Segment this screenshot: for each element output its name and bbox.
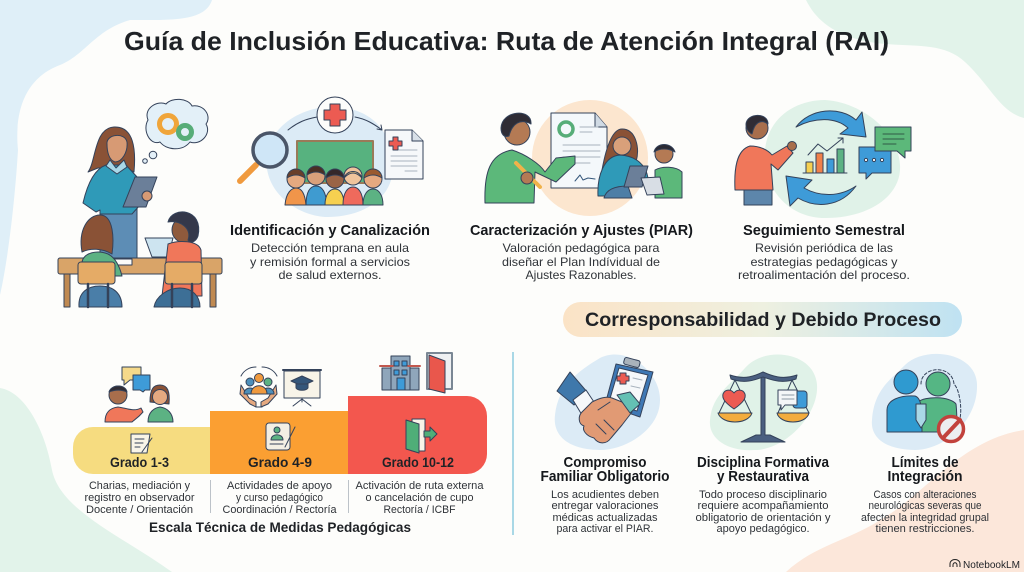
boy with tablet — [641, 144, 682, 198]
text block: seguimiento: Seguimiento Semestral — [743, 222, 905, 239]
watermark: NotebookLM: NotebookLM — [963, 559, 1020, 571]
text block: compromiso — [540, 454, 670, 535]
scale caption: grado 10-12: o cancelación de cupo — [366, 492, 474, 504]
step: grado 10-12: Grado 10-12 — [382, 454, 454, 470]
text block: seguimiento: estrategias pedagógicas y — [750, 255, 898, 269]
teacher — [83, 127, 157, 261]
text block: disciplina — [696, 454, 831, 535]
scale caption: grado 4-9: Actividades de apoyo — [227, 480, 332, 492]
blue blob — [872, 354, 977, 450]
staircase chart: grades — [73, 396, 487, 474]
illustration: identificación — [240, 97, 423, 217]
icon: red door — [427, 353, 452, 393]
text block: caracterización: Valoración pedagógica para — [502, 241, 660, 255]
text block: limites: neurológicas severas que — [868, 500, 982, 512]
text block: compromiso: entregar valoraciones — [552, 500, 659, 512]
text block: limites: afecten la integridad grupal — [861, 512, 989, 524]
clipboard — [605, 357, 653, 417]
chalkboard — [297, 141, 373, 183]
text block: compromiso: médicas actualizadas — [552, 512, 658, 524]
background blob: top left blue — [0, 0, 212, 295]
icon: graduation board — [283, 370, 321, 406]
illustration: caracterización — [485, 100, 682, 216]
thought bubble with gears — [143, 99, 208, 163]
text block: limites: Casos con alteraciones — [874, 489, 977, 501]
speech bubbles — [859, 127, 911, 179]
group of children — [285, 166, 383, 205]
mint blob — [710, 355, 817, 450]
text block: limites — [861, 454, 989, 535]
icon: shield — [916, 404, 926, 428]
scale caption: grado 10-12 — [356, 480, 484, 516]
student: girl — [78, 215, 122, 307]
green person — [918, 370, 961, 432]
scale caption: grado 4-9 — [222, 480, 337, 516]
heading pill: corresponsabilidad — [563, 302, 962, 337]
blue person — [887, 370, 922, 432]
step: grado 4-9 — [210, 411, 348, 474]
illustration: handshake — [555, 354, 660, 450]
text block: disciplina: y Restaurativa — [717, 468, 810, 485]
text block: disciplina: Todo proceso disciplinario — [699, 489, 827, 501]
medical document — [385, 130, 423, 179]
text block: disciplina: obligatorio de orientación y — [696, 512, 831, 524]
scale caption: grado 10-12: Rectoría / ICBF — [384, 504, 456, 516]
text block: identificación — [230, 222, 430, 282]
background blob: bottom left mint — [0, 388, 172, 572]
step: grado 1-3 — [73, 427, 210, 474]
handshake hands — [557, 372, 640, 443]
text block: compromiso: Los acudientes deben — [551, 489, 659, 501]
text block: seguimiento — [738, 222, 910, 282]
icon: chat bubbles — [778, 390, 807, 410]
vertical divider — [512, 352, 514, 535]
medical cross circle — [317, 97, 353, 133]
text block: identificación: de salud externos. — [278, 268, 382, 282]
scale caption: grado 1-3: registro en observador — [84, 492, 195, 504]
mint circle — [765, 100, 900, 218]
text block: identificación: Detección temprana en aula — [251, 241, 409, 255]
step: grado 10-12 — [348, 396, 487, 474]
peach circle — [532, 100, 648, 216]
PIAR document — [551, 113, 607, 188]
scale caption: grado 4-9: y curso pedagógico — [236, 492, 323, 504]
icon group: conversation — [105, 367, 173, 422]
scale caption: grado 1-3: Charias, mediación y — [89, 480, 190, 492]
illustration: scale of justice — [710, 355, 817, 450]
text block: compromiso: Familiar Obligatorio — [540, 468, 670, 485]
illustration: seguimiento — [735, 100, 911, 218]
text block: caracterización: Ajustes Razonables. — [526, 268, 636, 282]
title: Guía de Inclusión Educativa: Ruta de Atención Integral (RAI) — [124, 26, 889, 56]
text block: caracterización — [470, 222, 693, 282]
illustration: teacher with students — [58, 99, 222, 307]
student: boy — [145, 212, 202, 307]
background blob: top right mint — [806, 0, 1024, 118]
text block: disciplina: requiere acompañamiento — [698, 500, 828, 512]
text block: identificación: y remisión formal a servicios — [250, 255, 410, 269]
background blob: bottom right peach — [786, 430, 1024, 572]
icon group: hands and community — [240, 367, 277, 407]
text block: caracterización: Caracterización y Ajustes (PIAR) — [470, 222, 693, 239]
icon: stop sign — [938, 416, 964, 442]
scale caption: grado 1-3: Docente / Orientación — [86, 504, 193, 516]
icon: school building — [380, 356, 420, 390]
text block: limites: Integración — [888, 468, 962, 485]
text block: identificación: Identificación y Canalización — [230, 222, 430, 239]
step: grado 1-3: Grado 1-3 — [110, 454, 169, 470]
scale caption: grado 1-3 — [84, 480, 195, 516]
arc arrows — [288, 117, 382, 130]
text block: limites: Límites de — [892, 454, 958, 471]
scale title: Escala Técnica de Medidas Pedagógicas — [149, 519, 411, 535]
text block: disciplina: Disciplina Formativa — [697, 454, 830, 471]
scale caption: grado 10-12: Activación de ruta externa — [356, 480, 484, 492]
magnifier — [240, 133, 287, 181]
table — [58, 258, 222, 307]
text block: caracterización: diseñar el Plan Indívidual de — [502, 255, 660, 269]
woman with tablet — [598, 129, 648, 198]
text block: disciplina: apoyo pedagógico. — [716, 523, 810, 535]
text block: seguimiento: retroalimentación del proceso. — [738, 268, 910, 282]
cycle arrows — [786, 111, 866, 206]
blue blob — [266, 107, 393, 217]
illustration: limits of integration — [872, 354, 977, 450]
scale caption: grado 4-9: Coordinación / Rectoría — [222, 504, 337, 516]
text block: compromiso: para activar el PIAR. — [556, 523, 654, 535]
text block: compromiso: Compromiso — [564, 454, 646, 471]
heading pill: corresponsabilidad: Corresponsabilidad y Debido Proceso — [585, 310, 941, 331]
blue blob — [555, 354, 660, 450]
man pointing — [735, 115, 796, 205]
bar chart — [803, 138, 847, 173]
text block: limites: tienen restricciones. — [876, 523, 974, 535]
icon: heart — [723, 390, 745, 409]
step: grado 4-9: Grado 4-9 — [248, 454, 312, 470]
man in green — [485, 113, 575, 203]
text block: seguimiento: Revisión periódica de las — [755, 241, 893, 255]
balance — [718, 372, 809, 442]
